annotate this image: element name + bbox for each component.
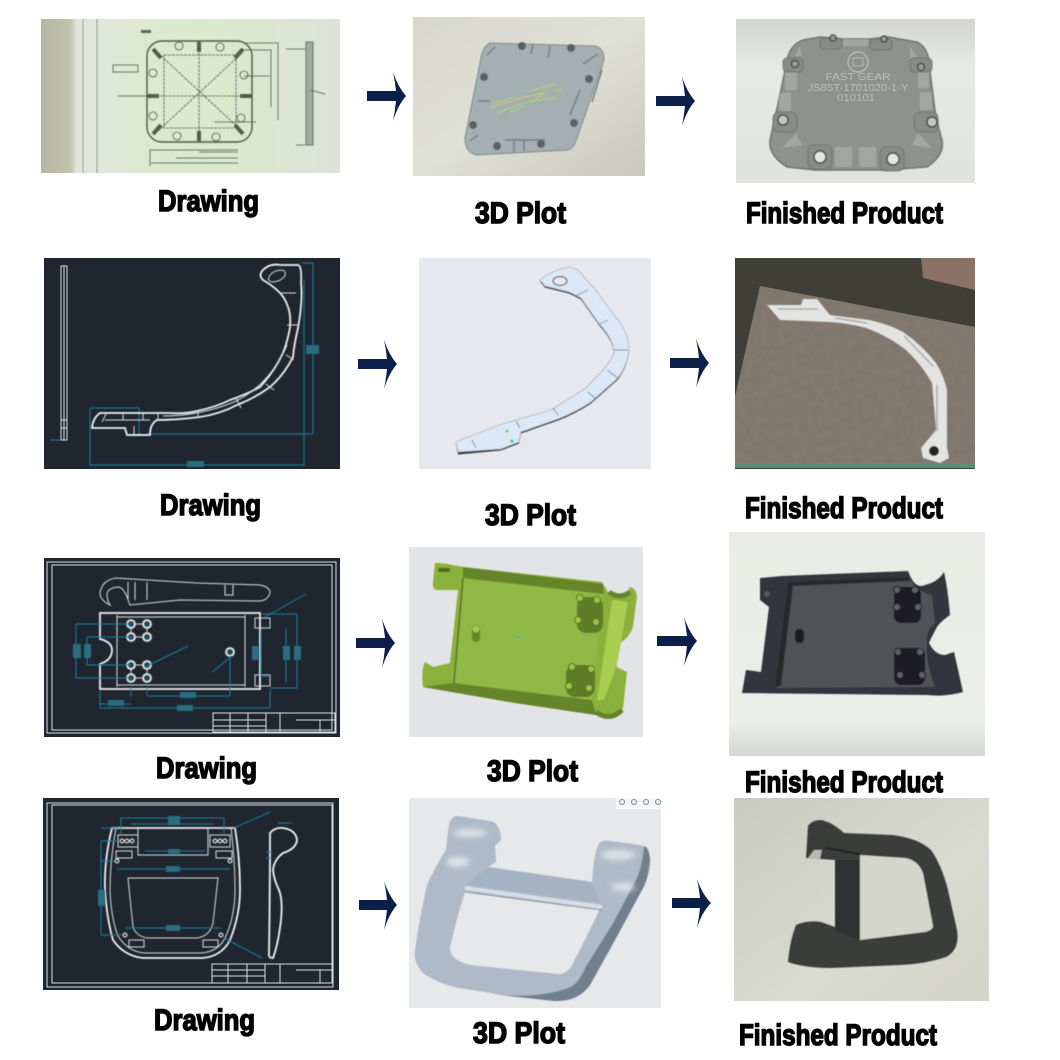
steel slab bbox=[735, 286, 975, 463]
plate model bbox=[465, 42, 604, 155]
heading: 3D Plot row 4: 3D Plot bbox=[473, 1017, 565, 1050]
dimension lines bbox=[101, 812, 292, 958]
handle front view bbox=[105, 828, 240, 958]
bracket model bbox=[456, 267, 629, 454]
panel: drawing 4, CAD handle bbox=[43, 798, 339, 990]
arrow 2 row 4 bbox=[672, 879, 711, 928]
cast bracket bbox=[767, 299, 949, 463]
boss clusters bbox=[566, 594, 603, 697]
panel: 3D plot 2 bbox=[419, 258, 651, 469]
heading: Finished Product row 1: Finished Product bbox=[746, 197, 943, 230]
heading: 3D Plot row 2: 3D Plot bbox=[485, 499, 576, 532]
panel: finished product 3 bbox=[729, 532, 985, 756]
dimensions bbox=[90, 263, 313, 465]
arrow 1 row 4 bbox=[359, 881, 397, 930]
black handle photo bbox=[788, 820, 958, 968]
arrow 2 row 1 bbox=[656, 77, 695, 126]
embossed part text: JS85T-1701020-1-Y bbox=[808, 82, 908, 94]
heading: Drawing row 1: Drawing bbox=[158, 185, 259, 218]
heading: Finished Product row 3: Finished Product bbox=[745, 766, 943, 799]
bracket front view bbox=[92, 265, 302, 435]
panel: finished product 2 bbox=[735, 258, 975, 469]
title block bbox=[213, 713, 335, 732]
dimension lines bbox=[76, 594, 306, 708]
heading: Drawing row 3: Drawing bbox=[156, 752, 257, 785]
blueprint plate outline bbox=[113, 30, 325, 166]
embossed part text: FAST GEAR bbox=[826, 71, 891, 83]
heading: Finished Product row 4: Finished Product bbox=[739, 1019, 937, 1052]
heading: 3D Plot row 3: 3D Plot bbox=[487, 755, 578, 788]
green edge strip bbox=[735, 463, 975, 468]
viewer toolbar bbox=[616, 798, 661, 809]
panel: drawing 1, photographed blueprint bbox=[41, 19, 340, 173]
panel: drawing 3, CAD housing bbox=[44, 558, 340, 737]
panel: 3D plot 4 bbox=[409, 798, 661, 1008]
embossed part text: 010101 bbox=[837, 92, 875, 104]
side view bar bbox=[50, 266, 67, 440]
handle side view bbox=[269, 828, 297, 958]
arrow 1 row 1 bbox=[367, 72, 406, 121]
panel: 3D plot 1 bbox=[413, 17, 645, 176]
arrow 2 row 2 bbox=[670, 339, 709, 388]
heading: Drawing row 2: Drawing bbox=[160, 489, 261, 522]
arrow 1 row 2 bbox=[358, 340, 397, 389]
boss clusters bbox=[894, 587, 921, 623]
wood block bbox=[921, 258, 975, 290]
handle model bbox=[415, 816, 650, 1001]
heading: Drawing row 4: Drawing bbox=[154, 1004, 255, 1037]
arrow 1 row 3 bbox=[356, 619, 395, 668]
panel: finished product 4 bbox=[734, 798, 989, 1001]
dark plastic housing bbox=[742, 571, 963, 696]
title block bbox=[212, 964, 333, 983]
main housing outline bbox=[100, 613, 270, 689]
panel: 3D plot 3 bbox=[409, 547, 643, 737]
embossed logo bbox=[848, 52, 868, 72]
heading: 3D Plot row 1: 3D Plot bbox=[475, 197, 566, 230]
panel: finished product 1 bbox=[736, 19, 975, 183]
heading: Finished Product row 2: Finished Product bbox=[745, 492, 943, 525]
arrow 2 row 3 bbox=[657, 617, 697, 666]
panel: drawing 2, CAD J-shaped bracket bbox=[44, 258, 340, 469]
green housing model bbox=[422, 563, 637, 718]
cast aluminium plate bbox=[770, 35, 942, 171]
top view hook profile bbox=[100, 578, 270, 605]
